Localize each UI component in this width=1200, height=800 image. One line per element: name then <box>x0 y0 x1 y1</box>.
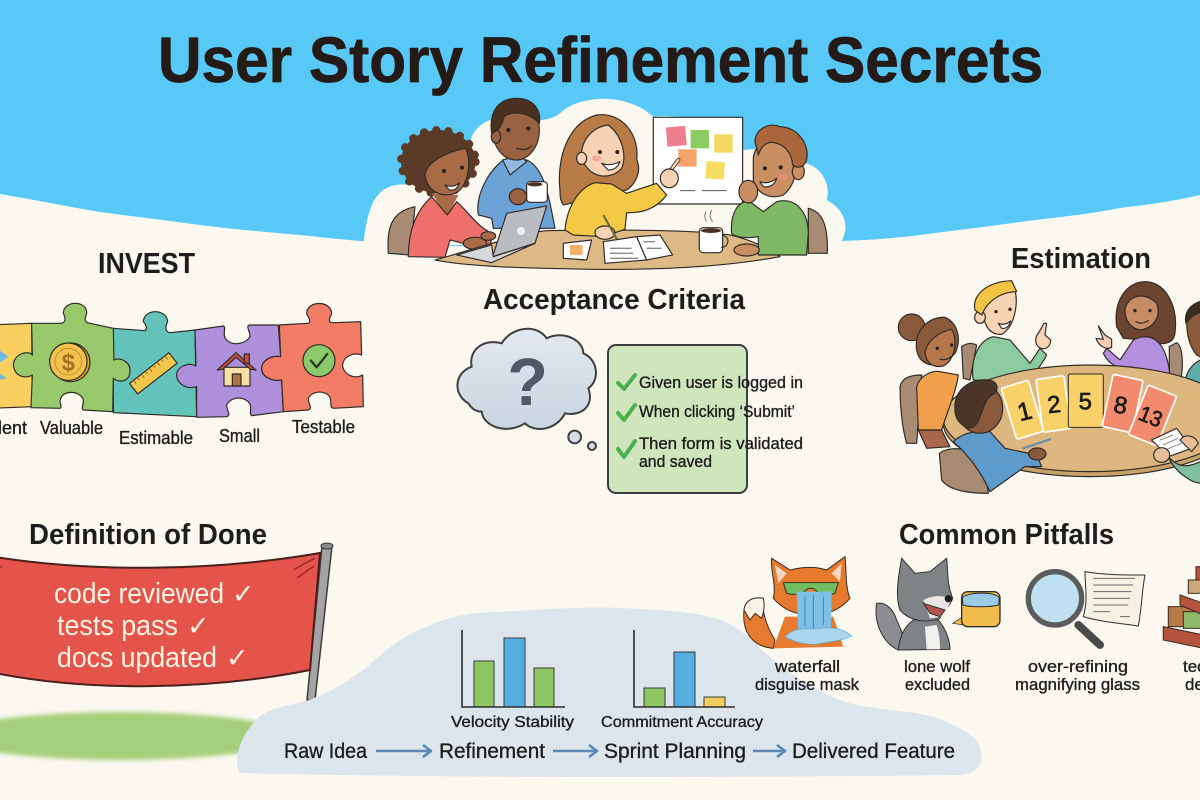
puzzle piece: Independent <box>0 323 32 408</box>
seated man partly off edge <box>1183 300 1200 393</box>
magnifying glass over document <box>1028 572 1145 645</box>
banner checklist: ✓ <box>187 611 210 642</box>
papers and sticky note <box>563 235 673 263</box>
ground patch <box>0 712 290 760</box>
bottom metrics and flow cloud <box>237 608 982 777</box>
puzzle piece: Small <box>177 325 283 417</box>
card text rows <box>618 374 803 471</box>
card text rows: Then form is validated <box>639 435 803 453</box>
card text rows: Given user is logged in <box>639 374 803 392</box>
bar chart label: commitment accuracy: Commitment Accuracy <box>601 714 763 731</box>
heading: Definition of Done: Definition of Done <box>29 519 267 551</box>
thought cloud with question mark: ? <box>507 346 548 420</box>
planning poker cards: 13 <box>1135 401 1166 432</box>
planning poker cards: 8 <box>1112 391 1129 420</box>
acceptance criteria card <box>608 345 803 493</box>
icon: blue fragment <box>0 348 8 380</box>
heading: INVEST: INVEST <box>98 248 195 280</box>
person: woman with curly hair <box>401 130 496 257</box>
flow: raw idea to delivered feature: Refinement <box>439 740 545 763</box>
planning poker cards: 5 <box>1079 388 1092 415</box>
card text rows: and saved <box>639 453 712 471</box>
flow: raw idea to delivered feature: Raw Idea <box>284 740 367 763</box>
banner checklist: docs updated <box>57 642 217 674</box>
person: man in green <box>731 125 808 256</box>
flow: raw idea to delivered feature: Sprint Planning <box>604 740 746 763</box>
pitfall labels: lone wolf <box>904 657 970 676</box>
banner checklist: tests pass <box>57 610 178 642</box>
banner checklist: ✓ <box>232 579 255 610</box>
whiteboard <box>653 117 743 204</box>
title: User Story Refinement Secrets <box>158 24 1043 96</box>
planning poker cards <box>1001 374 1177 446</box>
puzzle piece: Valuable <box>13 303 130 412</box>
pitfall labels: over-refining <box>1028 657 1128 676</box>
illustration: team refining stories <box>363 98 845 269</box>
chairs <box>388 207 827 255</box>
heading: Estimation: Estimation <box>1011 243 1151 275</box>
arrow <box>376 745 431 757</box>
wolf with yellow mug <box>876 558 1000 650</box>
puzzle labels: Testable <box>292 417 355 437</box>
pitfall illustrations <box>744 557 1200 650</box>
bar chart label: velocity stability: Velocity Stability <box>451 714 574 731</box>
icon: ruler <box>130 353 177 394</box>
illustration: planning poker table <box>898 281 1200 493</box>
banner checklist <box>54 578 255 674</box>
laptop <box>457 206 547 263</box>
pitfall labels: excluded <box>905 675 970 694</box>
table <box>435 230 780 269</box>
pitfall labels: disguise mask <box>755 675 859 694</box>
puzzle piece: Estimable <box>113 312 197 417</box>
icon: coin: $ <box>62 349 75 376</box>
heading: Common Pitfalls: Common Pitfalls <box>899 519 1114 551</box>
team cloud backdrop <box>363 99 845 246</box>
icon: house <box>217 353 256 386</box>
stacked bricks <box>1163 567 1200 648</box>
person with note at right edge <box>1152 428 1200 485</box>
seated woman with bun <box>898 314 958 448</box>
banner checklist: ✓ <box>226 643 249 674</box>
banner: definition of done <box>0 553 320 686</box>
seated woman in purple <box>1096 282 1182 382</box>
sky band <box>0 0 1200 248</box>
flag pole <box>307 543 333 700</box>
flow: raw idea to delivered feature <box>284 740 955 763</box>
puzzle piece: Testable <box>262 303 363 412</box>
pitfall labels: magnifying glass <box>1015 675 1140 694</box>
seated blond man <box>962 281 1051 383</box>
banner checklist: code reviewed <box>54 578 224 610</box>
bar chart: commitment accuracy <box>634 630 735 707</box>
puzzle labels <box>0 417 355 448</box>
pitfall labels <box>755 657 1200 694</box>
flow: raw idea to delivered feature: Delivered Feature <box>792 740 955 763</box>
arrow <box>553 745 597 757</box>
bar chart: velocity stability <box>462 630 565 707</box>
puzzle labels: Estimable <box>119 428 193 448</box>
puzzle chain: INVEST pieces <box>0 303 363 417</box>
thought cloud with question mark <box>457 329 596 450</box>
card text rows: When clicking ‘Submit’ <box>639 403 795 421</box>
person: woman presenting <box>559 115 678 242</box>
foreground man in blue <box>939 380 1050 493</box>
person: standing man with coffee <box>478 98 555 228</box>
coffee mug <box>699 210 728 253</box>
arrow <box>753 745 785 757</box>
puzzle labels: Valuable <box>40 418 103 438</box>
icon: coin <box>50 343 90 382</box>
planning poker cards: 1 <box>1015 397 1035 427</box>
heading: Acceptance Criteria: Acceptance Criteria <box>483 284 746 316</box>
round table <box>943 365 1200 477</box>
pitfall labels: waterfall <box>774 657 840 676</box>
planning poker cards: 2 <box>1046 391 1062 419</box>
puzzle labels: Small <box>219 426 260 446</box>
icon: check badge <box>303 345 335 377</box>
fox with waterfall disguise <box>744 557 852 648</box>
